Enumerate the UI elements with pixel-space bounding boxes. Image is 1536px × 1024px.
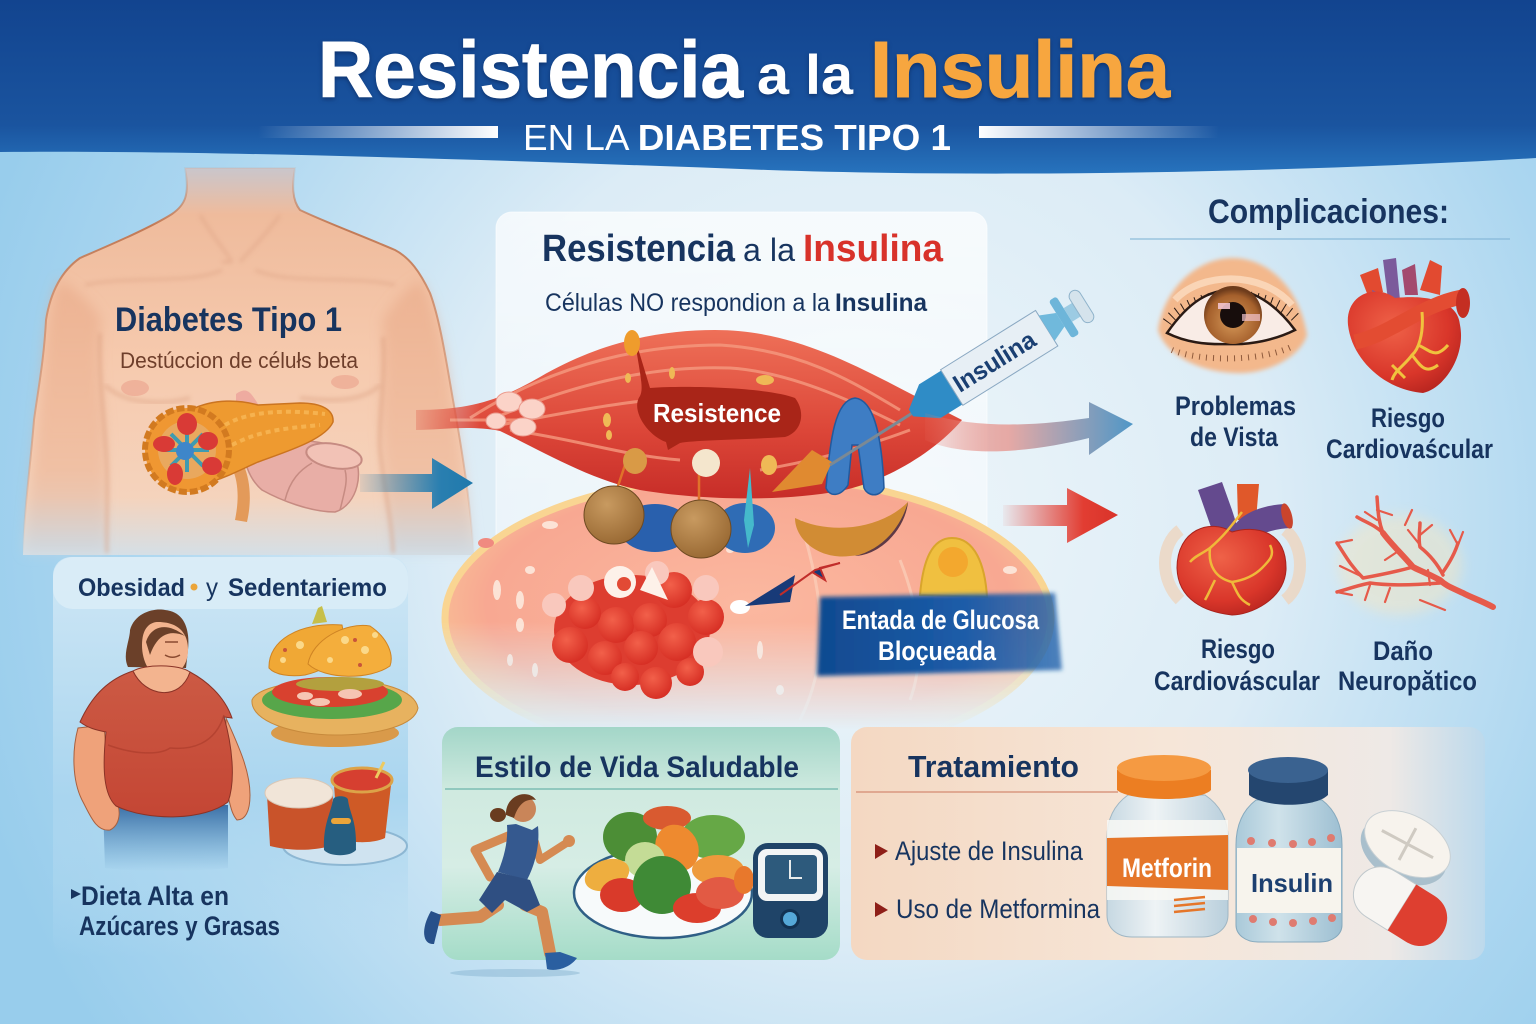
- subtitle: [258, 117, 1219, 158]
- heading: Obesidad: [78, 574, 185, 602]
- text: diet high in sugars and fats: Dieta Alta en: [81, 881, 229, 911]
- text: neuropathic damage: [1338, 636, 1477, 696]
- illustration: fat cell: [442, 484, 1054, 722]
- arrow: fat cell to complications: [1003, 488, 1118, 543]
- heading: [78, 574, 387, 602]
- text: vision problems: [1175, 391, 1296, 452]
- heading: Estilo de Vida Saludable: [475, 751, 799, 784]
- text: cardiovascular risk two: [1154, 634, 1320, 696]
- illustration: syringe: Insulina: [948, 325, 1042, 398]
- heading: y: [206, 574, 218, 602]
- arrow: muscle to complications: [925, 402, 1133, 455]
- title: a la: [757, 43, 854, 106]
- torso body: [23, 168, 474, 555]
- text: cardiovascular risk one: Riesgo: [1371, 403, 1445, 433]
- text: cardiovascular risk two: Cardiováscular: [1154, 666, 1320, 696]
- panel: treatment: [851, 727, 1485, 960]
- text: neuropathic damage: Daño: [1373, 636, 1433, 666]
- icon: pancreas: [145, 401, 333, 522]
- callout: blocked glucose entry: Entada de Glucosa: [842, 605, 1040, 635]
- callout: resistance: [624, 330, 801, 450]
- text: cardiovascular risk one: Cardiovaścular: [1326, 434, 1493, 464]
- icon: capsule: [1344, 857, 1457, 956]
- heading: Tratamiento: [908, 749, 1079, 784]
- list item: insulin adjustment: Ajuste de Insulina: [895, 836, 1084, 866]
- illustration: syringe: [772, 285, 1098, 492]
- arrow: torso to resistance panel: [360, 458, 473, 509]
- panel: complications: [1130, 193, 1510, 696]
- heading: Insulina: [803, 228, 944, 270]
- arrow: blocked glucose: [745, 563, 840, 606]
- icon: round tablet: [1349, 797, 1462, 899]
- panel header band: [53, 557, 408, 609]
- text: vision problems: de Vista: [1190, 422, 1279, 452]
- subheading: Insulina: [835, 289, 928, 317]
- text: cardiovascular risk two: Riesgo: [1201, 634, 1275, 664]
- list item: metformin use: Uso de Metformina: [896, 894, 1101, 924]
- illustration: insulin receptors and beads: [584, 398, 884, 558]
- heading: [542, 228, 944, 270]
- text: cardiovascular risk one: [1326, 403, 1493, 464]
- illustration: glucose channel: [920, 538, 987, 597]
- illustration: salad plate: [574, 806, 754, 938]
- title: [318, 25, 1171, 114]
- title: Insulina: [870, 25, 1171, 114]
- text: vision problems: Problemas: [1175, 391, 1296, 421]
- icon: glucose meter: [753, 843, 828, 938]
- illustration: insulin bottle: [1236, 757, 1342, 942]
- illustration: metformin bottle: Metforin: [1122, 853, 1212, 883]
- illustration: insulin bottle: Insulin: [1251, 868, 1333, 898]
- text: diet high in sugars and fats: Azúcares y Grasas: [79, 911, 280, 941]
- illustration: red cell cluster: [542, 561, 750, 699]
- illustration: blocked transporter: [795, 502, 908, 557]
- caption: beta cell destruction: Destúccion de célułs beta: [120, 348, 359, 373]
- heading: Resistencia: [542, 228, 736, 270]
- illustration: woman: [74, 610, 250, 871]
- illustration: muscle: [416, 330, 962, 498]
- text: neuropathic damage: Neuropătico: [1338, 666, 1477, 696]
- icon: stomach: [236, 390, 364, 512]
- subtitle: EN LA DIABETES TIPO 1: [523, 117, 951, 158]
- callout: resistance: Resistence: [653, 398, 781, 428]
- illustration: burger on plate: [252, 606, 418, 747]
- callout: blocked glucose entry: Bloçueada: [878, 636, 997, 666]
- panel: obesity and sedentarism: [53, 557, 418, 957]
- header banner: [0, 0, 1536, 174]
- heading: Sedentariemo: [228, 574, 387, 602]
- text: diet high in sugars and fats: [71, 881, 280, 941]
- callout: blocked glucose entry: [817, 593, 1062, 676]
- icon: heart one: [1348, 258, 1470, 393]
- title: Resistencia: [318, 25, 743, 114]
- illustration: metformin bottle: [1107, 755, 1228, 937]
- illustration: drinks and snacks: [265, 762, 407, 865]
- icon: eye: [1158, 258, 1307, 373]
- illustration: runner: [424, 794, 580, 977]
- icon: heart two: [1165, 482, 1300, 615]
- heading: a la: [743, 232, 795, 268]
- panel: healthy lifestyle: [424, 727, 840, 977]
- subheading: Células NO respondion a la: [545, 289, 830, 317]
- icon: nerve branches: [1337, 497, 1493, 615]
- heading: Complicaciones:: [1208, 193, 1449, 231]
- panel: insulin resistance mechanism: [416, 212, 1098, 760]
- heading: Diabetes Tipo 1: Diabetes Tipo 1: [115, 301, 342, 339]
- panel: torso with type 1 diabetes: [23, 168, 474, 555]
